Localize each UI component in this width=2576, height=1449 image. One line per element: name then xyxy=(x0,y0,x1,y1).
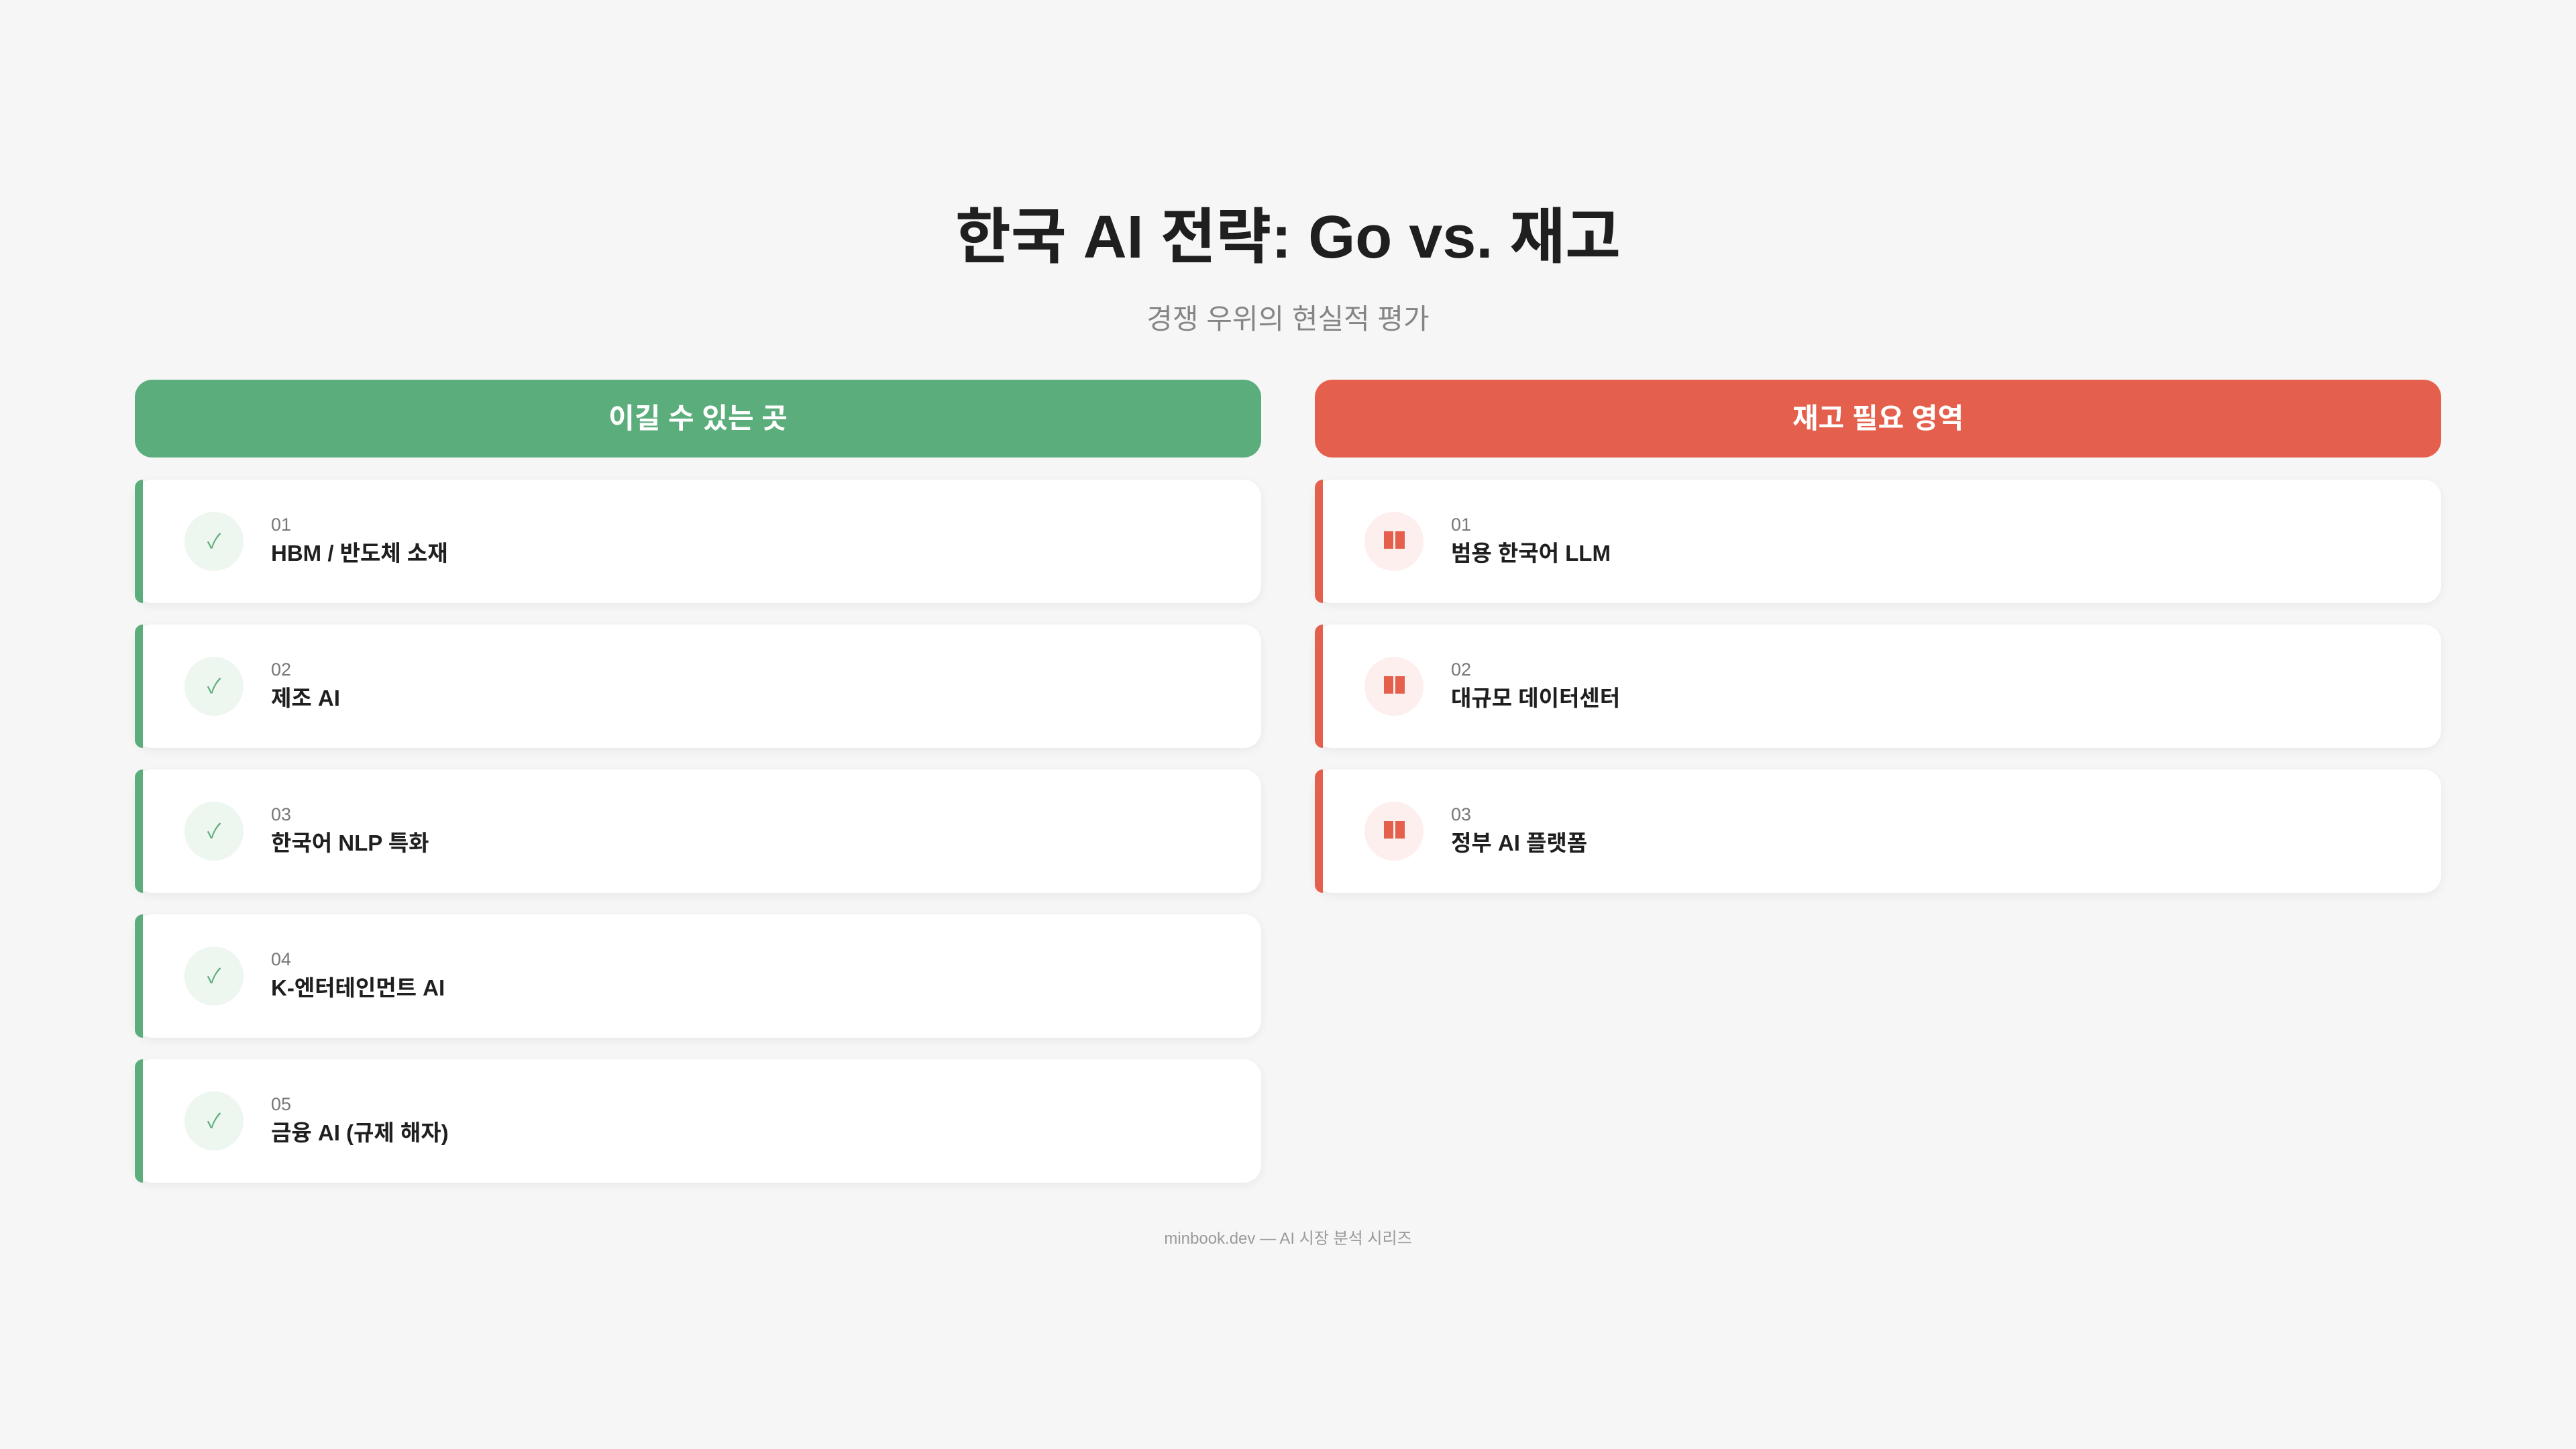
card 02 xyxy=(1315,625,2441,748)
card 05: ✓ xyxy=(207,1110,221,1132)
card 01: ✓ xyxy=(207,531,221,553)
card 04 xyxy=(135,914,1261,1038)
card 02: 02 xyxy=(271,659,291,680)
panel: win areas xyxy=(135,380,1261,1185)
card 05 xyxy=(135,1059,1261,1183)
card 02 xyxy=(135,625,1261,748)
title: 한국 AI 전략: Go vs. 재고 xyxy=(955,204,1621,271)
subtitle: 경쟁 우위의 현실적 평가 xyxy=(1146,303,1430,335)
card 03: 03 xyxy=(1451,804,1471,824)
footer: minbook.dev — AI 시장 분석 시리즈 xyxy=(1164,1230,1412,1248)
card 03: 03 xyxy=(271,804,291,824)
card 02: 대규모 데이터센터 xyxy=(1451,686,1620,710)
card 03 xyxy=(1315,769,2441,893)
card 05: 05 xyxy=(271,1094,291,1114)
card 04: 04 xyxy=(271,949,291,969)
heading: reconsider: 재고 필요 영역 xyxy=(1792,402,1964,433)
card 03: 한국어 NLP 특화 xyxy=(271,830,429,855)
card 05: 금융 AI (규제 해자) xyxy=(271,1120,449,1145)
card 01 xyxy=(135,480,1261,603)
card 02: ✓ xyxy=(207,676,221,698)
heading: win xyxy=(135,380,1261,458)
card 03: ✓ xyxy=(207,820,221,843)
card 04: K-엔터테인먼트 AI xyxy=(271,975,445,1000)
card 01: 01 xyxy=(1451,515,1471,535)
heading: reconsider xyxy=(1315,380,2441,458)
card 01: HBM / 반도체 소재 xyxy=(271,541,448,566)
card 02: 02 xyxy=(1451,659,1471,680)
card 01 xyxy=(1315,480,2441,603)
card 02: 제조 AI xyxy=(271,686,340,710)
card 04: ✓ xyxy=(207,965,221,987)
card 01: 01 xyxy=(271,515,291,535)
panel: reconsider areas xyxy=(1315,380,2441,895)
card 03 xyxy=(135,769,1261,893)
card 03: 정부 AI 플랫폼 xyxy=(1451,830,1587,855)
card 01: 범용 한국어 LLM xyxy=(1451,541,1611,566)
heading: win: 이길 수 있는 곳 xyxy=(608,402,788,433)
